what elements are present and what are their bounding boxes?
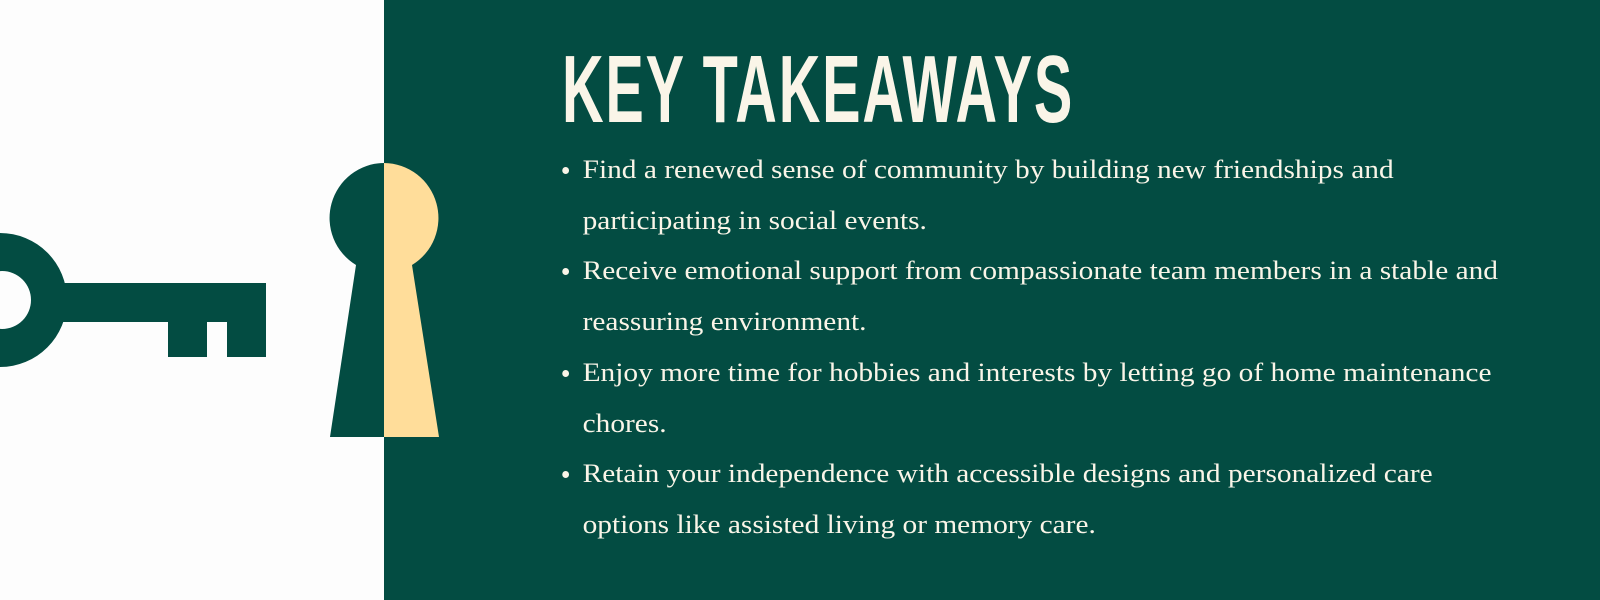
bullet 2 — [560, 246, 1600, 348]
bullet 2: reassuring environment. — [583, 307, 867, 336]
bullet 3: Enjoy more time for hobbies and interests by letting go of home maintenance — [583, 358, 1492, 387]
icon: keyhole — [330, 163, 439, 437]
bullet 1 — [560, 145, 1600, 246]
bullet 3 — [560, 348, 1600, 449]
text block: takeaways list — [562, 155, 1498, 539]
bullet 2: Receive emotional support from compassionate team members in a stable and — [583, 256, 1498, 285]
bullet 4: Retain your independence with accessible designs and personalized care — [583, 459, 1433, 488]
bullet 1: participating in social events. — [583, 206, 927, 235]
bullet 3: chores. — [583, 409, 667, 438]
title: KEY TAKEAWAYS — [562, 36, 1074, 143]
icon: key — [0, 233, 266, 367]
bullet 4: options like assisted living or memory care. — [583, 510, 1096, 539]
panel: dark green background — [384, 0, 1600, 600]
illustration: key and keyhole — [0, 163, 439, 437]
bullet 1: Find a renewed sense of community by building new friendships and — [583, 155, 1394, 184]
bullet 4 — [560, 449, 1600, 551]
